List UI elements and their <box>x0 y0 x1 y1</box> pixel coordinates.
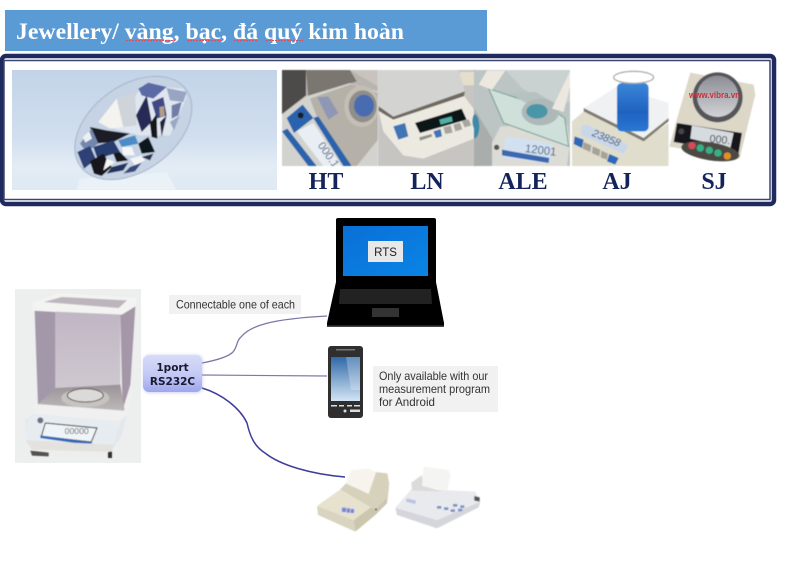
image caption labels: ALE <box>498 169 548 195</box>
port box: 1port RS232C: 1port <box>156 362 189 374</box>
note: connectable <box>169 295 301 314</box>
icon: laptop <box>327 218 444 327</box>
connector: lower curve <box>202 388 345 477</box>
port box: 1port RS232C <box>143 355 202 393</box>
icon: printer left <box>317 468 389 532</box>
image: analytical balance: 00000 <box>65 426 89 436</box>
image: analytical balance <box>15 289 141 463</box>
note: connectable: Connectable one of each <box>176 298 295 312</box>
image caption labels: AJ <box>602 169 632 195</box>
label: RTS: RTS <box>374 247 397 259</box>
note: Android program <box>373 366 498 412</box>
image: LN balance <box>378 70 479 166</box>
image: HT balance: 000.1 <box>315 140 341 170</box>
icon: smartphone <box>328 346 363 418</box>
image caption labels: HT <box>309 169 343 195</box>
note: Android program: for Android <box>379 395 435 409</box>
port box: 1port RS232C: RS232C <box>150 376 195 388</box>
image: HT balance <box>282 70 379 170</box>
image caption labels <box>309 169 727 195</box>
note: Android program: measurement program <box>379 382 490 396</box>
title banner: Jewellery/ vàng, bạc, đá quý kim hoàn <box>16 19 404 44</box>
watermark: vibra.vn: www.vibra.vn <box>688 90 740 100</box>
image: SJ balance <box>669 72 755 165</box>
connector: upper curve <box>202 316 327 363</box>
icon: printer right <box>395 467 480 528</box>
connector: middle line <box>202 375 327 376</box>
title banner <box>5 10 487 51</box>
image: ALE balance: 12001 <box>524 143 557 159</box>
image: diamond <box>12 55 277 201</box>
panel: balance models <box>2 55 774 204</box>
image caption labels: SJ <box>701 169 727 195</box>
image: SJ balance: 000. <box>709 133 731 147</box>
image caption labels: LN <box>410 169 444 195</box>
image: ALE balance <box>470 70 570 166</box>
image: AJ balance: 23858 <box>589 127 622 150</box>
image: AJ balance <box>572 70 669 166</box>
note: Android program: Only available with our <box>379 369 488 383</box>
